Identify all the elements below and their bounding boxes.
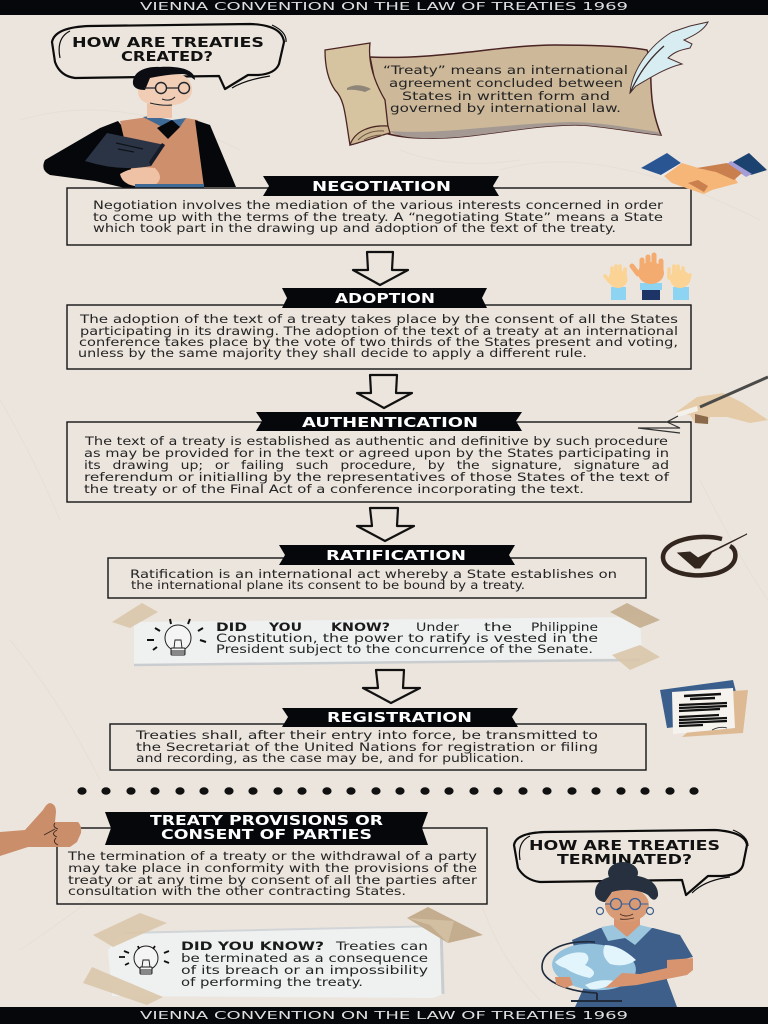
callout: did you know, ratification: Constitution, the power to ratify is vested in the bbox=[216, 631, 598, 645]
bottom title bar: VIENNA CONVENTION ON THE LAW OF TREATIES 1969 bbox=[140, 1009, 628, 1022]
icon: light bulb bbox=[119, 946, 169, 974]
heading banner and text box: treaty provisions or consent of parties: TREATY PROVISIONS OR bbox=[150, 814, 383, 829]
callout: did you know, ratification: YOU bbox=[268, 620, 302, 634]
illustration: woman holding a globe bbox=[542, 862, 693, 1007]
heading banner and text box: treaty provisions or consent of parties: may take place in conformity with the provisions of the bbox=[68, 861, 477, 875]
heading banner and text box: authentication: The text of a treaty is established as authentic and definitive by such procedure bbox=[84, 434, 668, 448]
icon: quill feather bbox=[630, 22, 708, 93]
callout: did you know, termination: be terminated as a consequence bbox=[181, 951, 428, 965]
heading banner and text box: authentication: the treaty or of the Final Act of a conference incorporating the text. bbox=[84, 482, 584, 496]
callout: did you know, ratification: Philippine bbox=[531, 620, 598, 634]
heading banner and text box: adoption: The adoption of the text of a treaty takes place by the consent of all the States bbox=[79, 312, 678, 326]
speech bubble: how are treaties created: HOW ARE TREATIES bbox=[72, 36, 264, 51]
heading banner and text box: adoption bbox=[67, 288, 691, 369]
scroll: treaty definition: governed by international law. bbox=[390, 101, 621, 115]
top title bar: VIENNA CONVENTION ON THE LAW OF TREATIES 1969 bbox=[140, 0, 628, 13]
heading banner and text box: negotiation bbox=[67, 176, 691, 245]
arrow: adoption to authentication bbox=[357, 375, 412, 408]
heading banner and text box: registration: Treaties shall, after their entry into force, be transmitted to bbox=[135, 728, 598, 742]
heading banner and text box: registration: and recording, as the case may be, and for publication. bbox=[136, 751, 524, 765]
callout: did you know, termination: DID YOU KNOW? bbox=[181, 939, 324, 953]
top title bar bbox=[0, 0, 768, 15]
speech bubble: how are treaties terminated: TERMINATED? bbox=[557, 853, 692, 868]
heading banner and text box: authentication: referendum or initialling by the representatives of those States of the text of bbox=[84, 470, 670, 484]
callout: did you know, termination bbox=[83, 907, 483, 1005]
icon: hand signing with pen bbox=[638, 377, 768, 433]
arrow: negotiation to adoption bbox=[353, 252, 408, 285]
icon: raised hands bbox=[605, 255, 690, 300]
speech bubble: how are treaties created: CREATED? bbox=[121, 50, 213, 65]
scroll: treaty definition bbox=[325, 43, 661, 145]
heading banner and text box: ratification bbox=[108, 545, 646, 598]
heading banner and text box: treaty provisions or consent of parties: consultation with the other contracting States. bbox=[68, 884, 406, 898]
heading banner and text box: authentication bbox=[67, 412, 691, 502]
callout: did you know, termination: of its breach or an impossibility bbox=[181, 963, 428, 977]
callout: did you know, ratification: DID bbox=[216, 620, 247, 634]
illustration: man holding a book bbox=[43, 67, 236, 188]
callout: did you know, termination: of performing the treaty. bbox=[181, 975, 363, 989]
heading banner and text box: authentication: its drawing up; or failing such procedure, by the signature, signature ad bbox=[84, 458, 669, 472]
heading banner and text box: registration: the Secretariat of the United Nations for registration or filing bbox=[136, 740, 598, 754]
speech bubble: how are treaties terminated bbox=[514, 830, 748, 895]
speech bubble: how are treaties created bbox=[52, 24, 286, 89]
heading banner and text box: treaty provisions or consent of parties: treaty or at any time by consent of all the parties after bbox=[68, 873, 477, 887]
icon: document bbox=[660, 680, 748, 737]
arrow: authentication to ratification bbox=[357, 508, 414, 541]
icon: handshake bbox=[641, 153, 767, 194]
scroll: treaty definition: agreement concluded between bbox=[389, 76, 623, 90]
icon: check mark bbox=[663, 534, 747, 575]
icon: thumbs up bbox=[0, 803, 81, 856]
heading banner and text box: registration bbox=[110, 708, 646, 770]
heading banner and text box: adoption: participating in its drawing. The adoption of the text of a treaty at an international bbox=[80, 324, 678, 338]
heading banner and text box: authentication: AUTHENTICATION bbox=[302, 416, 478, 431]
heading banner and text box: treaty provisions or consent of parties bbox=[57, 812, 487, 904]
heading banner and text box: negotiation: NEGOTIATION bbox=[312, 180, 451, 195]
heading banner and text box: registration: REGISTRATION bbox=[327, 711, 472, 726]
callout: did you know, ratification bbox=[112, 603, 660, 670]
heading banner and text box: treaty provisions or consent of parties: The termination of a treaty or the withdrawal of a party bbox=[67, 849, 477, 863]
heading banner and text box: adoption: ADOPTION bbox=[335, 292, 435, 307]
heading banner and text box: ratification: RATIFICATION bbox=[326, 549, 466, 564]
scroll: treaty definition: “Treaty” means an international bbox=[383, 63, 628, 77]
arrow: ratification to registration bbox=[363, 670, 420, 703]
callout: did you know, ratification: the bbox=[484, 620, 512, 634]
icon: light bulb bbox=[147, 619, 206, 655]
dotted divider bbox=[77, 787, 699, 795]
speech bubble: how are treaties terminated: HOW ARE TREATIES bbox=[529, 839, 720, 854]
heading banner and text box: ratification: Ratification is an international act whereby a State establishes on bbox=[130, 567, 617, 581]
heading banner and text box: negotiation: which took part in the drawing up and adoption of the text of the treaty. bbox=[93, 221, 616, 235]
heading banner and text box: adoption: unless by the same majority they shall decide to apply a different rule. bbox=[78, 346, 587, 360]
bottom title bar bbox=[0, 1007, 768, 1024]
callout: did you know, ratification: KNOW? bbox=[331, 620, 390, 634]
heading banner and text box: negotiation: Negotiation involves the mediation of the various interests concerned in order bbox=[93, 198, 663, 212]
heading banner and text box: negotiation: to come up with the terms of the treaty. A “negotiating State” means a State bbox=[93, 210, 663, 224]
callout: did you know, ratification: Under bbox=[416, 620, 459, 634]
heading banner and text box: adoption: conference takes place by the vote of two thirds of the States present and voting, bbox=[79, 335, 678, 349]
heading banner and text box: authentication: as may be provided for in the text or agreed upon by the States participating in bbox=[84, 446, 669, 460]
scroll: treaty definition: States in written form and bbox=[402, 89, 610, 103]
heading banner and text box: ratification: the international plane its consent to be bound by a treaty. bbox=[131, 578, 525, 592]
callout: did you know, ratification: President subject to the concurrence of the Senate. bbox=[216, 642, 593, 656]
heading banner and text box: treaty provisions or consent of parties: CONSENT OF PARTIES bbox=[161, 828, 372, 843]
callout: did you know, termination: Treaties can bbox=[335, 939, 428, 953]
